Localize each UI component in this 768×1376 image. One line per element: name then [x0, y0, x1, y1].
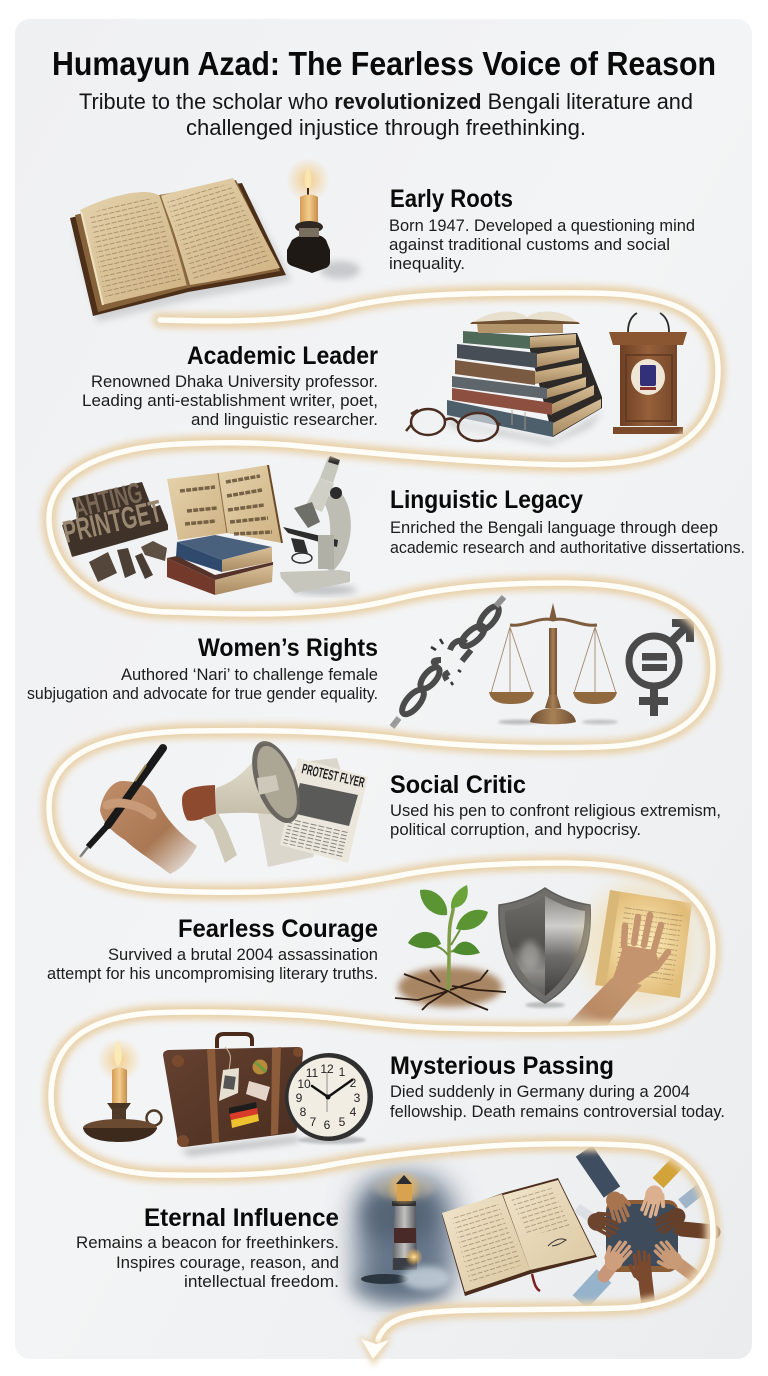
heading: social critic: Social Critic	[390, 771, 526, 799]
icon: hand on glowing page	[565, 883, 698, 1028]
icon: hand holding pen	[80, 748, 197, 874]
text: early roots: inequality.	[389, 254, 465, 273]
icon: sapling in cracked earth	[395, 885, 506, 1010]
icon: wall clock: 5	[339, 1115, 346, 1129]
icon: wall clock: 1	[339, 1065, 346, 1079]
subtitle: challenged injustice through freethinking.	[186, 115, 586, 140]
icon: open old book	[70, 178, 292, 322]
icon: lighthouse in storm	[352, 1170, 454, 1300]
section: linguistic legacy	[60, 456, 745, 595]
section: academic leader	[82, 311, 687, 445]
icon: megaphone	[182, 735, 310, 863]
icon: wooden printing type: AHTING	[70, 477, 146, 525]
section: fearless courage	[47, 883, 698, 1028]
text: fearless courage: attempt for his uncompromising literary truths.	[47, 964, 378, 983]
icon: wall clock	[285, 1053, 373, 1144]
text: women's rights: Authored ‘Nari’ to challenge female	[121, 665, 378, 684]
icon: wooden printing type: PRINTGET	[60, 493, 165, 550]
text: linguistic legacy: academic research and authoritative dissertations.	[390, 538, 745, 557]
icon: wall clock: 3	[354, 1091, 361, 1105]
heading: academic leader: Academic Leader	[187, 342, 378, 370]
icon: broken chain	[392, 597, 504, 727]
text: linguistic legacy: Enriched the Bengali language through deep	[390, 518, 718, 537]
icon: wall clock: 7	[310, 1115, 317, 1129]
heading: linguistic legacy: Linguistic Legacy	[390, 486, 583, 514]
text: women's rights: subjugation and advocate for true gender equality.	[27, 684, 378, 703]
subtitle	[79, 89, 693, 140]
icon: scales of justice	[489, 603, 618, 724]
icon: eyeglasses	[406, 409, 500, 441]
icon: gender equality symbol	[629, 619, 694, 716]
icon: open manuscript book	[442, 1178, 597, 1296]
icon: wall clock: 2	[350, 1076, 357, 1090]
section: early roots	[70, 158, 695, 322]
heading: fearless courage: Fearless Courage	[178, 915, 378, 943]
icon: candle on dish	[83, 1038, 162, 1142]
text: academic leader: Leading anti-establishment writer, poet,	[82, 391, 378, 410]
icon: wooden printing type	[60, 477, 168, 582]
icon: flyers: PROTEST FLYER	[300, 760, 366, 790]
text: women's rights	[27, 665, 378, 703]
icon: candle in inkwell	[286, 158, 360, 279]
icon: open Bengali book on two volumes	[167, 465, 282, 595]
icon: wall clock: 10	[297, 1077, 311, 1091]
title: Humayun Azad: The Fearless Voice of Reason	[52, 45, 716, 82]
heading: women's rights: Women’s Rights	[198, 634, 378, 662]
text: academic leader	[82, 372, 378, 429]
text: early roots: Born 1947. Developed a questioning mind	[389, 216, 695, 235]
section: mysterious passing	[83, 1034, 725, 1156]
section: social critic	[80, 735, 721, 874]
text: social critic	[390, 801, 721, 839]
text: eternal influence: Remains a beacon for freethinkers.	[76, 1233, 339, 1252]
text: social critic: political corruption, and hypocrisy.	[390, 820, 641, 839]
icon: flyers	[258, 758, 368, 867]
text: eternal influence: intellectual freedom.	[184, 1272, 339, 1291]
text: fearless courage	[47, 945, 378, 983]
section: eternal influence	[76, 1151, 713, 1302]
icon: wall clock: 12	[320, 1062, 334, 1076]
icon: lectern with seal	[609, 313, 687, 434]
text: mysterious passing	[390, 1082, 725, 1121]
heading: early roots: Early Roots	[390, 185, 513, 213]
text: social critic: Used his pen to confront religious extremism,	[390, 801, 721, 820]
icon: wall clock: 9	[296, 1091, 303, 1105]
winding glowing ribbon with arrowhead	[49, 293, 718, 1366]
icon: joined hands on book	[577, 1151, 713, 1302]
icon: stack of books	[447, 311, 604, 445]
text: mysterious passing: Died suddenly in Germany during a 2004	[390, 1082, 690, 1101]
icon: leather suitcase with stickers	[163, 1034, 303, 1156]
text: eternal influence: Inspires courage, reason, and	[116, 1253, 339, 1272]
text: eternal influence	[76, 1233, 339, 1291]
heading: eternal influence: Eternal Influence	[144, 1204, 339, 1232]
text: academic leader: and linguistic researcher.	[191, 410, 378, 429]
text: academic leader: Renowned Dhaka University professor.	[91, 372, 378, 391]
text: fearless courage: Survived a brutal 2004 assassination	[108, 945, 378, 964]
text: linguistic legacy	[390, 518, 745, 557]
icon: microscope	[280, 456, 357, 595]
section: women's rights	[27, 597, 694, 727]
icon: wall clock: 11	[306, 1066, 319, 1080]
heading: mysterious passing: Mysterious Passing	[390, 1052, 614, 1080]
text: early roots	[389, 216, 695, 273]
icon: wall clock: 8	[300, 1105, 307, 1119]
icon: battered metal shield	[499, 888, 590, 1008]
icon: wall clock: 4	[350, 1105, 357, 1119]
icon: wall clock: 6	[324, 1118, 331, 1132]
text: mysterious passing: fellowship. Death remains controversial today.	[390, 1102, 725, 1121]
text: early roots: against traditional customs and social	[389, 235, 670, 254]
subtitle: Tribute to the scholar who revolutionized Bengali literature and	[79, 89, 693, 114]
